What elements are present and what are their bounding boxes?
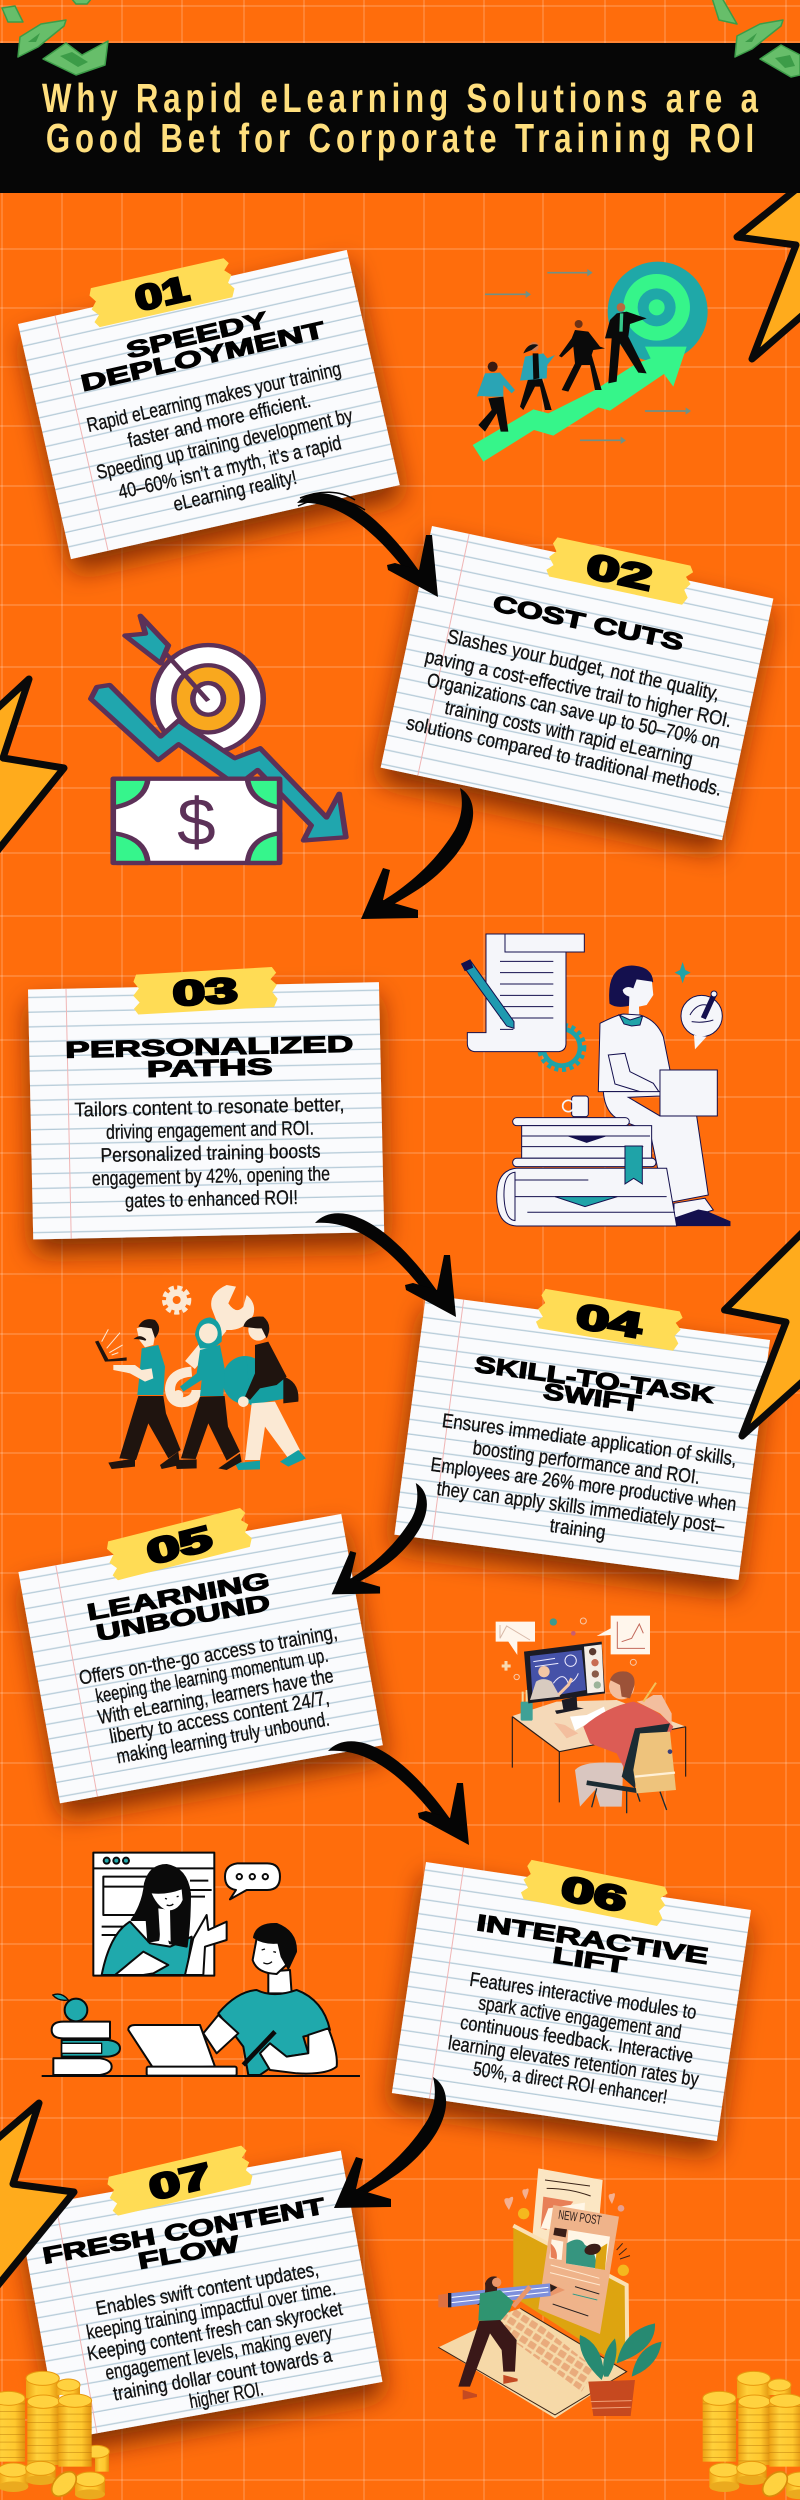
body text: Ensures immediate application of skills, [441, 1410, 738, 1471]
illustration: target, falling arrow and dollar bill [91, 616, 346, 863]
panel: 03 personalized paths [28, 965, 384, 1239]
body text: Speeding up training development by [94, 405, 355, 484]
title line 1: Why Rapid eLearning Solutions are a [42, 75, 759, 121]
arrow: card 2 to card 3 [361, 788, 473, 919]
heading [40, 2193, 330, 2291]
body text [78, 2256, 356, 2430]
panel: 07 fresh content flow [14, 2128, 382, 2440]
tape number 01 [87, 257, 236, 329]
body text: keeping the learning momentum up. [94, 1645, 330, 1708]
money bills right [712, 0, 800, 77]
body text: boosting performance and ROI. [471, 1437, 701, 1489]
arrow: card 5 to card 6 [328, 1741, 469, 1845]
heading: DEPLOYMENT [78, 316, 327, 396]
body text: Tailors content to resonate better, [74, 1094, 345, 1122]
panel: 01 speedy deployment [14, 231, 400, 559]
body text: gates to enhanced ROI! [125, 1187, 298, 1213]
tape number 03 [132, 967, 278, 1016]
arrow: card 3 to card 4 [315, 1213, 456, 1317]
arrow: card 6 to card 7 [334, 2077, 446, 2208]
body text [424, 1409, 744, 1561]
illustration: woman with laptop on books [462, 934, 730, 1226]
body text: training costs with rapid eLearning [443, 697, 695, 771]
body text: Keeping content fresh can skyrocket [86, 2298, 345, 2366]
heading [73, 295, 327, 396]
illustration: video call between two people [42, 1853, 360, 2076]
body text: engagement levels, making every [104, 2322, 334, 2385]
body text [77, 1622, 354, 1772]
body text: With eLearning, learners have the [96, 1665, 335, 1729]
lightning bolt left [0, 679, 64, 860]
dollar sign: $ [177, 785, 216, 860]
tape number 03: 03 [172, 971, 239, 1014]
panel: 04 skill-to-task swift [394, 1273, 773, 1580]
lightning bolt right middle [724, 1225, 800, 1436]
body text [74, 1094, 347, 1214]
body text [404, 621, 743, 801]
icon: gold coins left [0, 2371, 109, 2500]
tape number 06 [520, 1859, 669, 1928]
body text: eLearning reality! [171, 467, 299, 516]
body text: solutions compared to traditional methods. [404, 712, 724, 801]
body text: Personalized training boosts [100, 1140, 321, 1167]
new post label: NEW POST [557, 2207, 602, 2228]
body text: driving engagement and ROI. [106, 1118, 314, 1144]
heading: SPEEDY [124, 306, 270, 363]
illustration: team climbing arrow to target [473, 262, 708, 462]
tape number 02: 02 [583, 547, 656, 598]
heading [471, 1351, 716, 1426]
tape number 07 [105, 2145, 254, 2218]
tape number 07: 07 [145, 2156, 215, 2208]
body text: Offers on-the-go access to training, [77, 1622, 339, 1690]
tape number 02 [545, 536, 694, 607]
heading: INTERACTIVE [475, 1909, 710, 1969]
heading: LEARNING [85, 1567, 272, 1625]
body text: 40–60% isn’t a myth, it’s a rapid [116, 432, 343, 504]
body text: Slashes your budget, not the quality, [445, 626, 722, 705]
body text: Enables swift content updates, [94, 2259, 320, 2320]
body text [84, 358, 365, 531]
title banner [0, 43, 800, 193]
money bills left [2, 0, 108, 75]
body text: they can apply skills immediately post– [435, 1478, 726, 1538]
body text: Rapid eLearning makes your training [85, 358, 343, 437]
tape number 04: 04 [573, 1297, 646, 1346]
illustration: laptop with new post and pencil [438, 2168, 662, 2418]
title line 2: Good Bet for Corporate Training ROI [46, 115, 754, 161]
heading: SKILL-TO-TASK [473, 1351, 716, 1408]
lightning bolt lower left [0, 2103, 74, 2295]
body text: Employees are 26% more productive when [429, 1454, 738, 1516]
body text: training [548, 1515, 607, 1544]
panel: 05 learning unbound [14, 1490, 383, 1803]
tape number 06: 06 [558, 1869, 630, 1920]
illustration: student at desk in online class [496, 1616, 686, 1813]
body text [443, 1967, 710, 2113]
body text: spark active engagement and [477, 1992, 683, 2044]
body text: making learning truly unbound. [115, 1708, 331, 1768]
body text: higher ROI. [188, 2378, 265, 2413]
body text: Features interactive modules to [468, 1969, 698, 2024]
heading [472, 1909, 710, 1990]
heading: UNBOUND [94, 1589, 272, 1646]
tape number 05 [104, 1507, 254, 1582]
body text: training dollar count towards a [112, 2344, 335, 2406]
lightning bolt top right [737, 170, 800, 359]
body text: Organizations can save up to 50–70% on [425, 670, 722, 753]
heading: FRESH CONTENT [40, 2193, 327, 2269]
body text: paving a cost-effective trail to higher ROI. [423, 646, 734, 732]
heading: PATHS [146, 1053, 273, 1082]
body text: learning elevates retention rates by [447, 2032, 700, 2091]
panel: 06 interactive lift [392, 1844, 754, 2141]
heading: SWIFT [542, 1378, 642, 1417]
body text: continuous feedback. Interactive [459, 2012, 694, 2068]
body text: engagement by 42%, opening the [92, 1163, 330, 1190]
arrow: card 4 to card 5 [332, 1483, 427, 1594]
arrow: card 1 to card 2 [297, 492, 438, 597]
heading [85, 1567, 275, 1647]
heading: FLOW [136, 2230, 241, 2274]
body text: keeping training impactful over time. [85, 2278, 338, 2344]
heading: PERSONALIZED [65, 1031, 353, 1063]
body text: faster and more efficient. [126, 390, 313, 452]
illustration: three people carrying wrench and bulb [95, 1285, 306, 1470]
tape number 01: 01 [131, 269, 193, 319]
heading: COST CUTS [491, 590, 686, 655]
heading [65, 1031, 354, 1084]
heading: LIFT [551, 1942, 628, 1978]
tape number 05: 05 [143, 1519, 216, 1573]
panel: 02 cost cuts [381, 511, 776, 840]
body text: 50%, a direct ROI enhancer! [472, 2058, 669, 2109]
tape number 04 [535, 1288, 684, 1352]
body text: liberty to access content 24/7, [108, 1687, 331, 1748]
icon: gold coins right [703, 2371, 800, 2500]
